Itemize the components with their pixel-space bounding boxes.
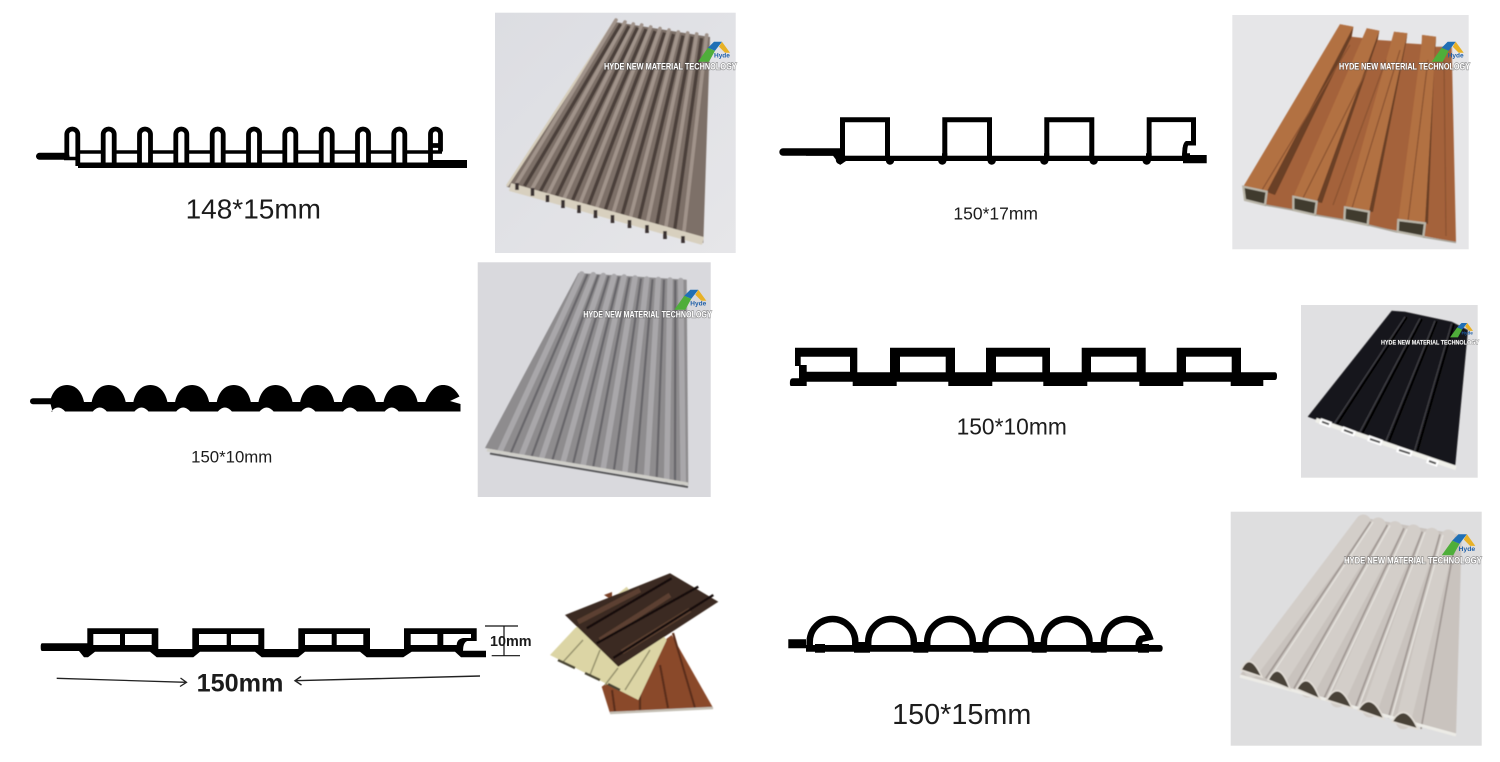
logo (1432, 42, 1464, 62)
watermark: HYDE NEW MATERIAL TECHNOLOGY (604, 61, 737, 71)
logo: Hyde (714, 53, 730, 60)
dimension label: 150*17mm (953, 203, 1038, 223)
watermark: HYDE NEW MATERIAL TECHNOLOGY (1339, 61, 1470, 71)
panel: 150x15mm arched product (788, 512, 1482, 746)
logo: Hyde (1462, 331, 1473, 336)
width label: 150mm (197, 670, 283, 698)
profile drawing: rectangular slats (790, 348, 1277, 386)
logo: Hyde (690, 301, 707, 308)
product photo (478, 262, 712, 497)
product photo (1231, 512, 1482, 746)
panel: 150x10mm slatted product (790, 305, 1479, 478)
product photo (1232, 15, 1470, 249)
logo: Hyde (1448, 53, 1464, 60)
logo (1450, 323, 1473, 337)
logo: Hyde (1458, 546, 1475, 553)
thickness dimension: 10mm (490, 634, 532, 650)
profile drawing: 148x15mm (40, 129, 467, 168)
watermark: HYDE NEW MATERIAL TECHNOLOGY (583, 309, 712, 319)
arrow: pointing right (57, 678, 187, 686)
dimension label: 150*10mm (957, 413, 1067, 439)
panel: 150x17mm product (783, 15, 1470, 249)
thickness dimension (485, 626, 532, 656)
panel: 150x10mm scalloped product (33, 262, 712, 497)
panel: 150mm wide, 10mm thick product (41, 573, 718, 713)
logo (1442, 534, 1475, 555)
product photo (495, 13, 737, 253)
logo (674, 290, 707, 310)
arrow: pointing left (295, 676, 480, 685)
logo (698, 42, 730, 62)
dimension label: 148*15mm (186, 193, 321, 224)
product photo (1301, 305, 1479, 478)
profile drawing: hollow arches (788, 619, 1163, 653)
dimension label: 150*10mm (191, 448, 272, 467)
dimension label: 150*15mm (892, 699, 1031, 731)
panel: 148x15mm product (40, 13, 737, 253)
profile drawing: double cell slats (41, 628, 486, 657)
product photo: three panel finishes (550, 573, 718, 713)
profile drawing: 150x17mm (783, 120, 1207, 165)
profile drawing: scalloped solid (33, 385, 460, 412)
